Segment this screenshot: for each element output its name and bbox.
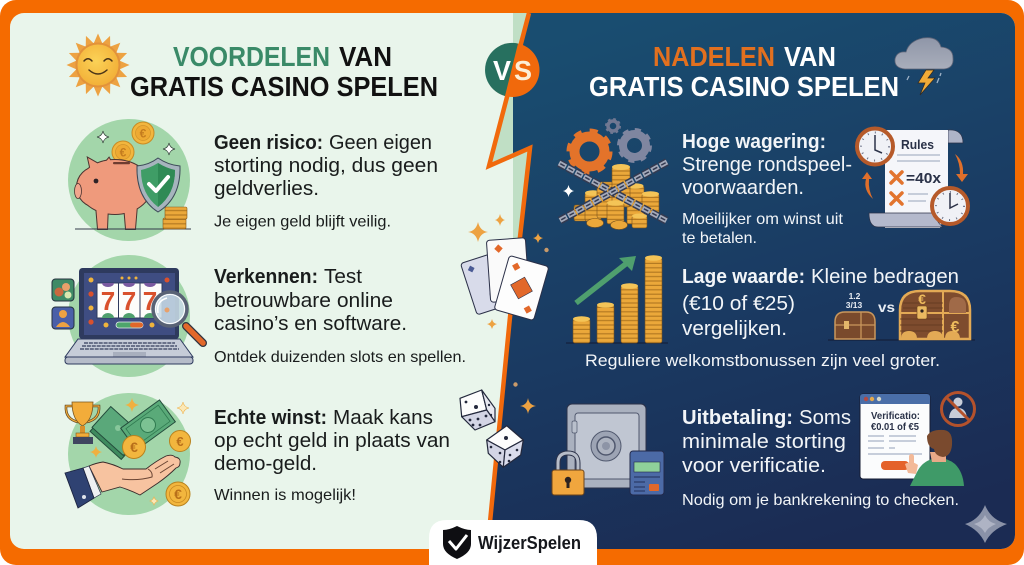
text: echte winst: Winnen is mogelijk! — [214, 487, 356, 504]
text: echte winst: Echte winst: — [214, 407, 327, 429]
side tiles — [52, 279, 74, 329]
text: uitbetaling: Nodig om je bankrekening to checken. — [682, 492, 959, 509]
text: geen risico — [214, 132, 438, 230]
VS badge — [485, 43, 540, 97]
euro coins above piggy — [112, 122, 154, 163]
text: verkennen: Ontdek duizenden slots en spellen. — [214, 349, 466, 366]
coin pile — [574, 164, 659, 230]
icon: hand with money and trophy — [65, 393, 190, 515]
banknotes — [90, 400, 175, 459]
sevens — [101, 286, 157, 316]
title: nadelen: GRATIS CASINO SPELEN — [589, 71, 899, 102]
crosses and multiplier: =40x — [906, 170, 942, 187]
gears — [569, 119, 650, 172]
small chest — [835, 312, 875, 339]
title: voordelen: VAN — [339, 41, 392, 72]
icon: piggy bank with shield — [68, 119, 191, 241]
logo tab: WijzerSpelen — [429, 520, 597, 565]
chains — [559, 162, 667, 221]
title: voordelen: VOORDELEN — [173, 41, 330, 72]
sevens: 7 — [122, 286, 136, 316]
zigzag divider — [488, 13, 530, 522]
VS badge: V — [493, 55, 511, 86]
hand — [65, 455, 180, 508]
padlock — [552, 453, 584, 495]
panel: nadelen background — [488, 13, 1015, 549]
title: nadelen: NADELEN — [653, 41, 775, 72]
text: geen risico: storting nodig, dus geen — [214, 155, 438, 177]
text: echte winst — [214, 407, 450, 504]
icon: rules scroll with clocks — [857, 128, 968, 228]
title: nadelen — [589, 41, 899, 102]
text: hoge wagering — [682, 131, 852, 247]
text: reguliere welkomstbonussen: Reguliere welkomstbonussen zijn veel groter. — [585, 351, 940, 370]
fraction labels — [846, 291, 863, 310]
text: uitbetaling — [682, 407, 959, 509]
icon: shield check — [443, 526, 471, 559]
rules text: Rules — [901, 137, 934, 152]
clocks — [857, 128, 968, 224]
text: verkennen — [214, 266, 466, 366]
icon: dice — [460, 390, 523, 467]
big chest: € — [918, 291, 926, 307]
verification text: €0.01 of €5 — [871, 422, 919, 433]
text: hoge wagering: Moeilijker om winst uit — [682, 211, 844, 228]
pig body — [77, 158, 151, 229]
icon: small versus large treasure chest: vs — [878, 299, 895, 315]
big chest — [900, 291, 970, 339]
sevens: 7 — [143, 286, 157, 316]
icon: storm cloud — [895, 38, 953, 95]
card terminal — [630, 451, 664, 495]
text: geen risico: geldverlies. — [214, 178, 319, 200]
title: nadelen: VAN — [784, 41, 836, 72]
coins: € — [130, 439, 138, 455]
icon: playing cards — [460, 238, 549, 321]
text: hoge wagering: te betalen. — [682, 230, 757, 247]
text: lage waarde — [682, 266, 959, 340]
no-photo sign — [942, 392, 974, 426]
magnifier — [153, 292, 203, 343]
icon: safe with padlock and card terminal — [552, 404, 664, 495]
text: lage waarde: vergelijken. — [682, 318, 787, 340]
VS badge: S — [514, 55, 532, 86]
logo tab: WijzerSpelen: WijzerSpelen — [478, 533, 581, 553]
verification text: Verificatio: — [871, 411, 920, 422]
text: uitbetaling: voor verificatie. — [682, 455, 826, 477]
euro coins above piggy: € — [120, 146, 127, 160]
text: geen risico: Geen eigen — [329, 132, 432, 154]
big chest: € — [951, 319, 960, 336]
icon: gears and chained coins — [559, 119, 667, 230]
sparkles — [90, 398, 139, 458]
text: hoge wagering: voorwaarden. — [682, 177, 804, 199]
icon: laptop with slot machine — [52, 255, 203, 377]
text: verkennen: betrouwbare online — [214, 290, 393, 312]
text: geen risico: Geen risico: — [214, 132, 323, 154]
text: verkennen: casino’s en software. — [214, 313, 407, 335]
text: echte winst: demo-geld. — [214, 453, 317, 475]
cycle arrows — [862, 154, 968, 199]
coins: € — [174, 486, 182, 502]
text: lage waarde: Lage waarde: — [682, 266, 805, 288]
coin stack — [163, 207, 187, 229]
sevens: 7 — [101, 286, 115, 316]
text: uitbetaling: minimale storting — [682, 431, 846, 453]
shield — [137, 158, 180, 212]
icon: small versus large treasure chest — [828, 291, 975, 340]
fraction labels: 1.2 — [849, 291, 861, 301]
text: uitbetaling: Soms — [799, 407, 851, 429]
green arrow — [576, 256, 636, 303]
title: voordelen — [130, 41, 438, 102]
title: voordelen: GRATIS CASINO SPELEN — [130, 71, 438, 102]
fraction labels: 3/13 — [846, 300, 863, 310]
coins: € — [176, 434, 184, 449]
text: uitbetaling: Uitbetaling: — [682, 407, 793, 429]
decorative large sparkle — [965, 505, 1007, 543]
euro coins above piggy: € — [140, 126, 147, 140]
verification text — [871, 411, 920, 433]
person — [905, 430, 964, 486]
text: hoge wagering: Hoge wagering: — [682, 131, 826, 153]
trophy — [66, 402, 99, 444]
text: echte winst: Maak kans — [333, 407, 433, 429]
text: geen risico: Je eigen geld blijft veilig. — [214, 214, 391, 230]
icon: verification window with person — [860, 392, 974, 486]
text: hoge wagering: Strenge rondspeel- — [682, 154, 852, 176]
pig outline — [77, 158, 151, 229]
text: echte winst: op echt geld in plaats van — [214, 430, 450, 452]
icon: smiling sun — [66, 34, 130, 96]
decorative sparkles around cards and dice — [468, 214, 549, 414]
text: verkennen: Test — [324, 266, 362, 288]
text: lage waarde: (€10 of €25) — [682, 293, 795, 315]
text: lage waarde: Kleine bedragen — [811, 266, 959, 288]
icon: growing coin stacks with arrow — [566, 255, 668, 343]
text: verkennen: Verkennen: — [214, 266, 318, 288]
coins — [122, 430, 190, 506]
